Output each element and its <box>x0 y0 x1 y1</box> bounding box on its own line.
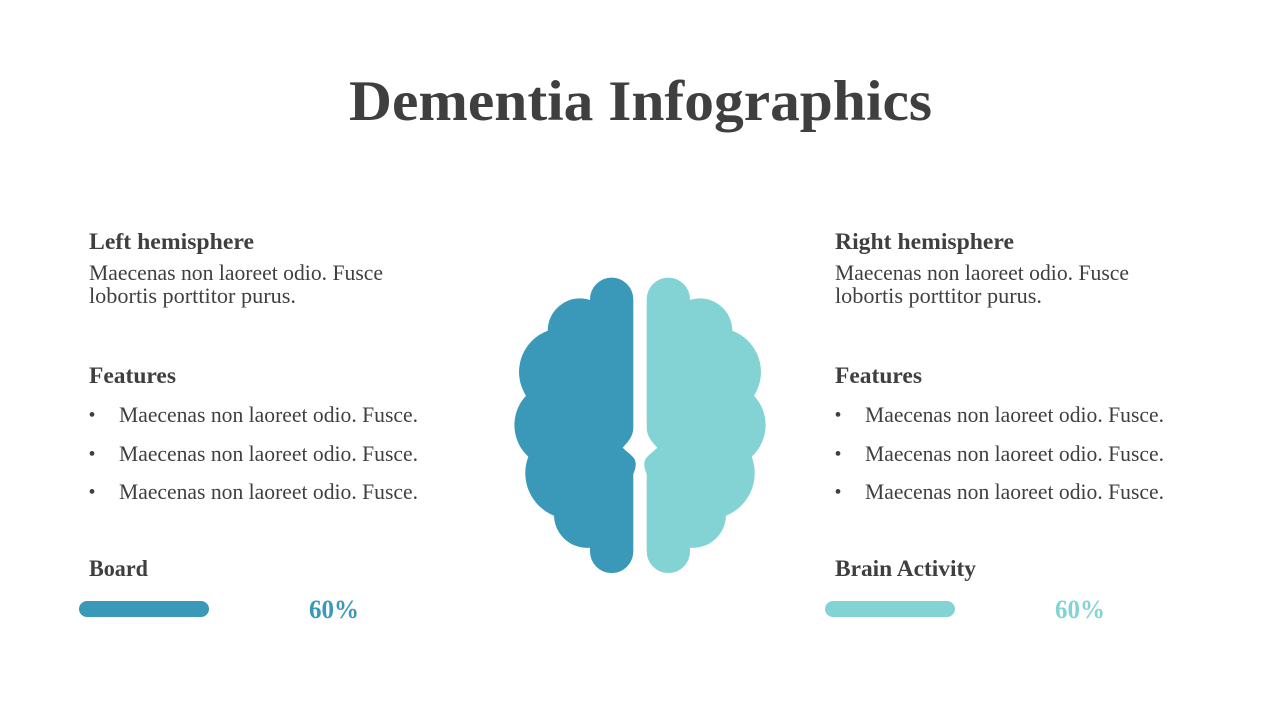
value: brain activity percent: 60% <box>1055 595 1105 624</box>
panel: right hemisphere <box>825 229 1164 624</box>
panel: left hemisphere <box>79 229 418 624</box>
list: left features: Maecenas non laoreet odio. Fusce. <box>119 402 418 427</box>
icon: brain <box>514 278 766 573</box>
list: left features: • <box>88 444 96 466</box>
list: left features <box>88 402 418 504</box>
heading: left hemisphere: Left hemisphere <box>89 229 254 255</box>
list: right features: • <box>834 444 842 466</box>
list: right features: Maecenas non laoreet odio. Fusce. <box>865 441 1164 466</box>
list: left features: • <box>88 482 96 504</box>
heading: left features: Features <box>89 363 176 389</box>
list: right features: Maecenas non laoreet odio. Fusce. <box>865 479 1164 504</box>
brain right half <box>644 278 766 573</box>
heading: right features: Features <box>835 363 922 389</box>
heading: board: Board <box>89 556 148 582</box>
title: Dementia Infographics <box>349 70 932 133</box>
heading: right hemisphere: Right hemisphere <box>835 229 1014 255</box>
list: right features: • <box>834 404 842 426</box>
text block: right description <box>835 260 1129 308</box>
list: left features: Maecenas non laoreet odio. Fusce. <box>119 441 418 466</box>
heading: brain activity: Brain Activity <box>835 556 976 582</box>
list: right features: • <box>834 482 842 504</box>
text block: left description: Maecenas non laoreet odio. Fusce <box>89 260 383 285</box>
text block: left description: lobortis porttitor purus. <box>89 283 296 308</box>
brain left half <box>514 278 636 573</box>
progress bar: brain activity <box>825 601 955 617</box>
text block: left description <box>89 260 383 308</box>
text block: right description: lobortis porttitor purus. <box>835 283 1042 308</box>
list: right features: Maecenas non laoreet odio. Fusce. <box>865 402 1164 427</box>
value: board percent: 60% <box>309 595 359 624</box>
text block: right description: Maecenas non laoreet odio. Fusce <box>835 260 1129 285</box>
list: left features: • <box>88 404 96 426</box>
list: left features: Maecenas non laoreet odio. Fusce. <box>119 479 418 504</box>
list: right features <box>834 402 1164 504</box>
progress bar: board <box>79 601 209 617</box>
